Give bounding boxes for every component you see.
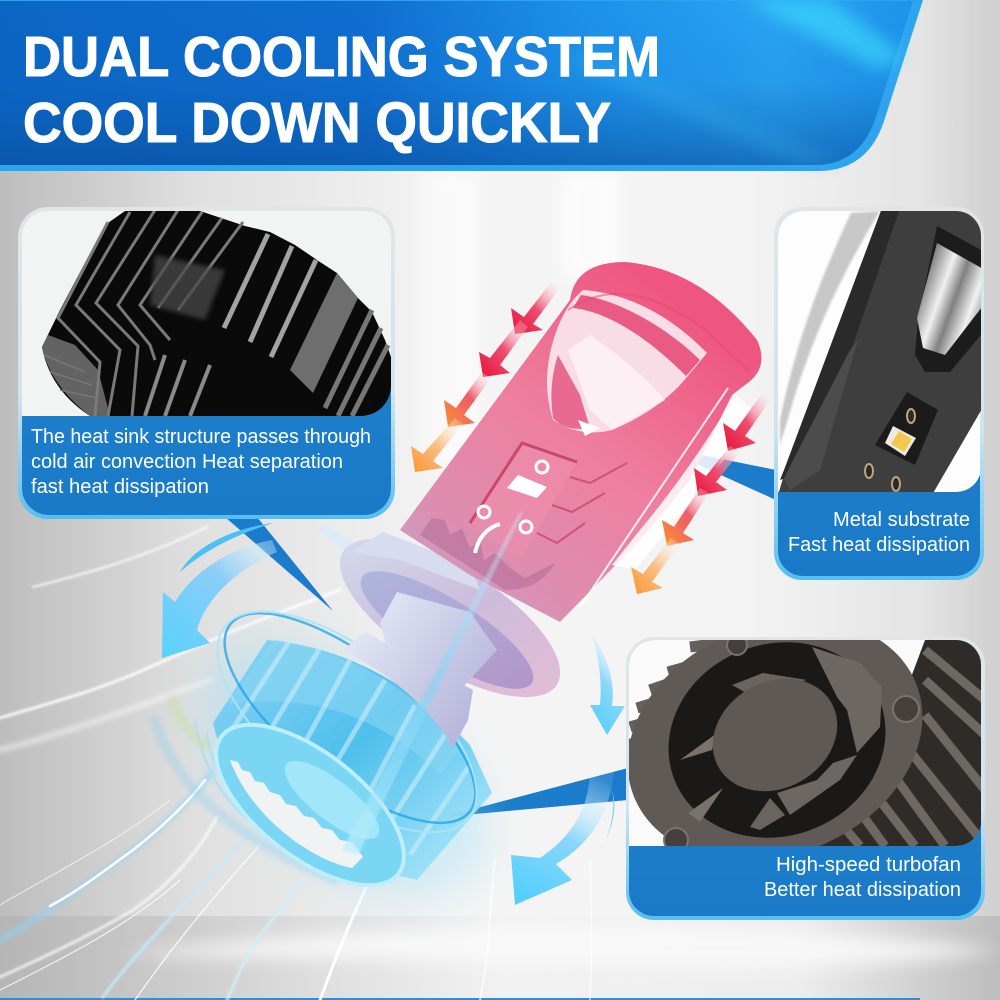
caption: metal substrate: Metal substrate (833, 509, 970, 531)
caption: heat sink: cold air convection Heat separation (31, 451, 343, 473)
title (23, 25, 660, 155)
bulb: toothed lens opening (230, 760, 363, 868)
air flow streaks (0, 527, 592, 1000)
bulb: heat sink body in blue (156, 571, 534, 946)
photo: metal substrate with LED (778, 208, 990, 495)
caption: heat sink (31, 426, 371, 498)
bulb: knurled neck (343, 632, 473, 748)
pointer: metal substrate card to bulb (657, 446, 776, 500)
panel: turbofan (626, 637, 985, 920)
bulb: stem (380, 592, 497, 688)
caption: turbofan: Better heat dissipation (764, 879, 961, 901)
caption: metal substrate (788, 509, 970, 556)
title: DUAL COOLING SYSTEM (23, 25, 660, 89)
bulb: H4 base flange (317, 509, 583, 727)
caption: heat sink: fast heat dissipation (31, 476, 209, 498)
header banner (0, 0, 923, 171)
blue curved arrows (162, 523, 625, 905)
panel: metal substrate (774, 207, 990, 580)
bulb: pink lamp body (400, 262, 761, 622)
caption: metal substrate: Fast heat dissipation (788, 534, 970, 556)
caption: turbofan (764, 854, 961, 901)
caption: heat sink: The heat sink structure passes through (31, 426, 371, 448)
pointer: fan card to bulb (443, 768, 628, 817)
title: COOL DOWN QUICKLY (23, 91, 611, 155)
bulb: comb fins at board base (420, 518, 555, 590)
caption: turbofan: High-speed turbofan (776, 854, 961, 876)
pointer: heat sink card to bulb (225, 517, 333, 611)
bulb illustration (156, 262, 761, 946)
photo: cooling fan (629, 640, 981, 846)
bulb: central light beam (342, 510, 524, 855)
panel: heat sink (18, 207, 395, 519)
red and orange heat arrows, left (411, 281, 560, 472)
red and orange heat arrows, right (631, 392, 771, 594)
photo: heat sink fins (22, 210, 391, 416)
bulb: lens window (547, 290, 750, 436)
bulb: LED board and contacts (470, 443, 627, 560)
